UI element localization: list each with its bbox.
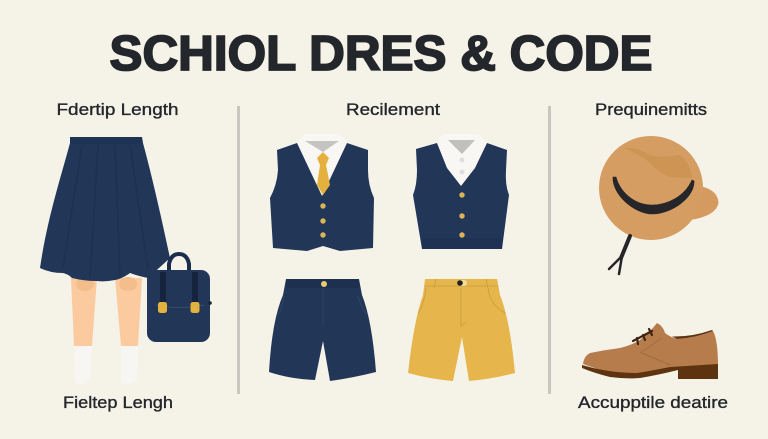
icon: pleated skirt [40,137,170,281]
icon: hat [599,136,718,274]
caption: left column bottom: Fieltep Lengh [63,393,173,412]
icon: sweater vest with collar [413,134,509,249]
icon: brown shoe [582,323,718,379]
heading: right column: Prequinemitts [595,100,707,119]
icon: backpack [147,254,212,342]
title: SCHIOL DRES & CODE [110,27,652,81]
divider left [237,106,240,394]
icon: navy shorts [269,279,376,381]
icon: legs and socks [71,277,142,384]
icon: vest with tie [270,134,374,251]
caption: right column bottom: Accupptile deatire [578,393,728,412]
heading: left column top: Fdertip Length [56,100,178,119]
icon: yellow shorts [408,279,515,381]
heading: middle column: Recilement [346,100,440,119]
divider right [548,106,551,394]
